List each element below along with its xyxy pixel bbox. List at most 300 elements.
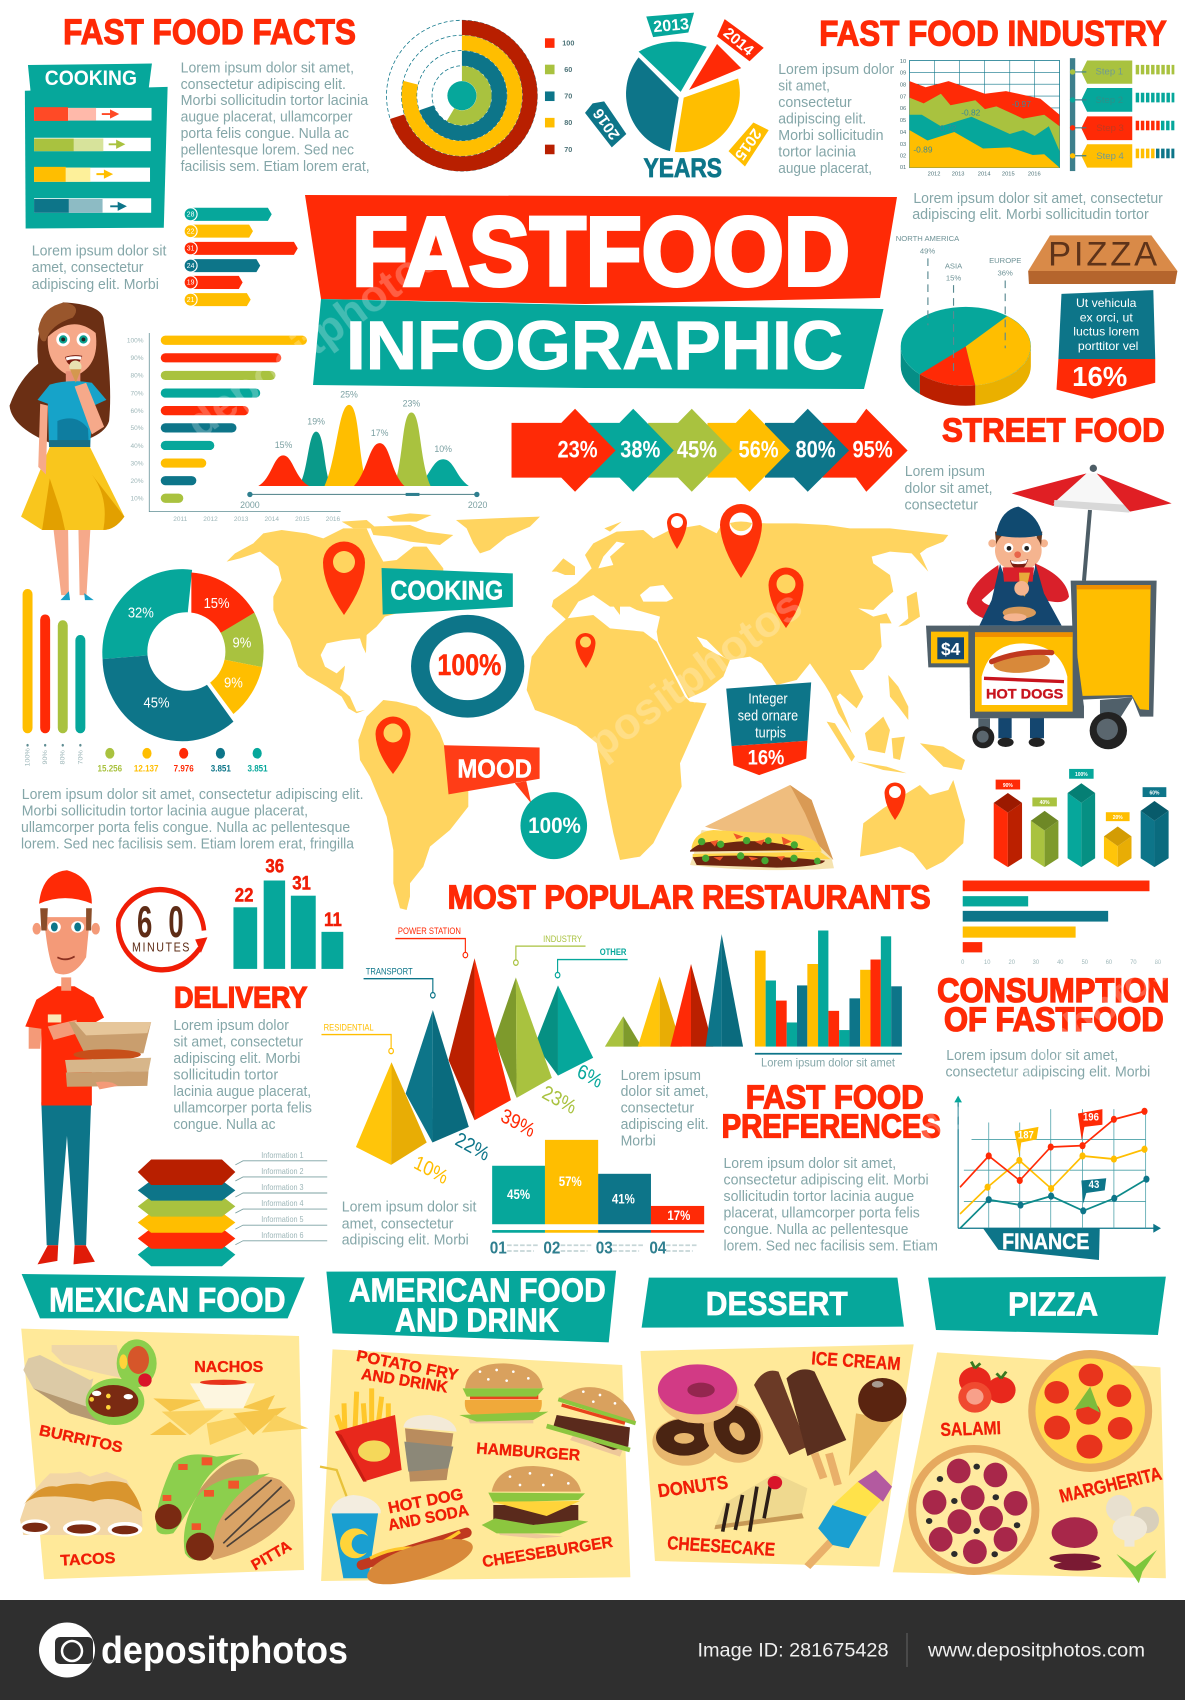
chart: stacked area: 06 [900, 106, 906, 112]
heading: consumption of fastfood: OF FASTFOOD [944, 1000, 1164, 1038]
text: facts paragraph: porta felis congue. Nulla ac [181, 125, 350, 142]
chart: horizontal bars: 40 [1057, 959, 1064, 966]
legend: donut values: 7.976 [174, 763, 194, 774]
panel: pizza: SALAMI [940, 1418, 1001, 1441]
chart: pyramids: INDUSTRY [543, 934, 582, 944]
ribbon: percentage chevrons [512, 409, 908, 492]
chart: donut: 9% [232, 634, 252, 651]
chart: delivery bars: 11 [324, 908, 342, 930]
chart: horizontal progress bars: 60% [130, 408, 144, 415]
chart: horizontal bars: 0 [961, 959, 965, 966]
chart: 3D pie by region: 36% [998, 269, 1013, 278]
text: facts paragraph: facilisis sem. Etiam lorem erat, [181, 158, 370, 175]
icon: rainbow popsicle [807, 1470, 892, 1567]
text: consumption paragraph: Lorem ipsum dolor sit amet, [946, 1046, 1118, 1063]
icon: 60 minutes clock: 6 [137, 896, 152, 947]
chart: stacked area: 09 [900, 71, 906, 77]
chart: layered hexagons: Information 5 [261, 1214, 304, 1224]
panel: mexican food [20, 1274, 308, 1579]
legend: donut values: 3.851 [248, 763, 268, 774]
panel: dessert [641, 1278, 914, 1567]
chart: pyramids: OTHER [600, 946, 626, 957]
chart: 3D bars [994, 769, 1169, 867]
heading: most popular restaurants: MOST POPULAR RESTAURANTS [448, 879, 931, 916]
upper right section [512, 13, 1177, 513]
icon: chocolate popsicles [754, 1369, 846, 1485]
chart: pyramids: 10% [411, 1152, 451, 1190]
chart: 3D pie by region: EUROPE [989, 256, 1021, 265]
chart: four columns: 01 [490, 1237, 507, 1258]
ribbon: percentage chevrons: 56% [738, 438, 779, 464]
chart: finance lines: 196 [1083, 1112, 1099, 1124]
text: facts paragraph [181, 59, 370, 175]
icon: salami, mushrooms and basil [1049, 1495, 1159, 1583]
chart: horizontal bars: 50 [1082, 959, 1088, 966]
panel: american food and drink: HAMBURGER [476, 1440, 581, 1465]
text: donut paragraph: ullamcorper porta felis congue. Nulla ac pellentesque [21, 818, 350, 835]
text: street food note: consectetur [905, 496, 978, 513]
text: donut paragraph: Morbi sollicitudin tortor lacinia augue placerat, [22, 801, 308, 819]
watermarks [177, 230, 1181, 1158]
middle right section [448, 682, 1169, 1260]
chart: horizontal progress bars: 2015 [295, 516, 310, 523]
callout: 16 percent [1056, 290, 1155, 399]
chart: stacked area: 03 [900, 142, 906, 148]
chart: 3D bars: 60% [1149, 790, 1160, 797]
chart: stacked area: 05 [900, 118, 906, 124]
text: pyramid note: amet, consectetur [342, 1214, 454, 1231]
panel: mexican food: TACOS [60, 1550, 116, 1570]
heading: delivery: DELIVERY [174, 980, 307, 1014]
map pins [323, 504, 906, 820]
chart: four columns: 03 [596, 1237, 613, 1258]
chart: pyramids: 6% [574, 1060, 605, 1093]
chart: 3D pie by region: 49% [920, 247, 935, 256]
text: street food note: Lorem ipsum [905, 463, 985, 480]
chart: vertical tube bars: 90% [42, 750, 49, 764]
ribbon: percentage chevrons: 95% [853, 438, 893, 464]
chart: layered hexagons: Information 4 [261, 1198, 304, 1208]
icon: pizza box: PIZZA [1048, 236, 1157, 274]
chart: stacked area: 2014 [978, 172, 991, 178]
panel: american food and drink: HOT DOG [387, 1486, 465, 1517]
chart: horizontal bars: 60 [1106, 959, 1113, 966]
text: industry paragraph: adipiscing elit. [778, 111, 866, 128]
chart: years pie: 2016 [590, 105, 623, 143]
text: street food note: dolor sit amet, [905, 480, 993, 497]
legend: rings: 70 [564, 145, 572, 154]
middle left section [21, 568, 704, 1266]
icon: burrito [23, 1339, 157, 1425]
text: preferences paragraph [724, 1154, 938, 1254]
chart: donut: 32% [128, 604, 154, 621]
chart: mountain peaks: 17% [371, 428, 389, 438]
world map [227, 513, 965, 910]
chart: mountain peaks: 2020 [468, 500, 487, 510]
panel: american food and drink [320, 1271, 636, 1594]
chart: mountain peaks [240, 390, 487, 510]
chart: finance lines [954, 1096, 1161, 1260]
callout: 16 percent: Ut vehicula [1076, 296, 1137, 310]
chart: arrow bars: 19 [187, 280, 195, 287]
legend: rings: 70 [564, 92, 572, 101]
chart: stacked area: -0.97 [1012, 99, 1031, 109]
chart: four columns: 41% [612, 1191, 635, 1206]
chart: stacked area: 07 [900, 94, 906, 100]
chart: layered hexagons: Information 2 [261, 1166, 304, 1176]
callout: 16 percent: luctus lorem [1073, 325, 1139, 339]
footer bar: depositphotos [101, 1630, 348, 1672]
panel: american food and drink: AND SODA [387, 1502, 471, 1535]
chart: years pie: 2013 [653, 15, 690, 36]
icon: tacos [20, 1472, 143, 1537]
chart: horizontal progress bars: 2016 [326, 516, 341, 523]
chart: finance lines: 43 [1089, 1179, 1100, 1191]
text: preferences paragraph: sollicitudin tortor lacinia augue [724, 1187, 914, 1204]
footer bar [0, 1600, 1185, 1700]
chart: layered hexagons: Information 3 [261, 1182, 304, 1192]
heading: consumption of fastfood [937, 971, 1169, 1038]
chart: 3D bars: 100% [1075, 772, 1088, 778]
icon: donuts [652, 1364, 775, 1473]
legend: rings: 100 [562, 39, 574, 48]
icon: nachos [150, 1380, 308, 1445]
panel: cooking bars [25, 64, 168, 228]
chart: horizontal progress bars: 30% [130, 460, 144, 467]
chart: finance lines: 187 [1018, 1130, 1034, 1142]
text: facts paragraph: Lorem ipsum dolor sit amet, [181, 59, 354, 76]
panel: american food and drink: CHEESEBURGER [481, 1534, 614, 1571]
chart: pyramids: TRANSPORT [366, 966, 413, 976]
chart: years pie: YEARS [644, 153, 722, 183]
panel: american food and drink: AMERICAN FOOD [349, 1271, 606, 1309]
chart: 3D bars: 20% [1113, 815, 1123, 821]
chart: donut: 45% [144, 694, 170, 711]
chart: arrow bars: 21 [187, 297, 195, 304]
chart: four columns: 02 [543, 1237, 560, 1258]
chart: delivery bars: 36 [265, 854, 284, 877]
chart: vertical tube bars: 80% [60, 750, 67, 764]
chart: arrow bars: 31 [187, 246, 195, 253]
chart: horizontal progress bars: 70% [130, 390, 144, 397]
chart: four columns: 57% [559, 1174, 582, 1189]
chart: horizontal progress bars: 80% [130, 373, 144, 380]
chart: steps [1070, 58, 1174, 171]
panel: american food and drink: AND DRINK [395, 1301, 559, 1339]
chart: horizontal bars: 30 [1033, 959, 1040, 966]
text: facts paragraph: augue placerat, ullamcorper [181, 109, 352, 126]
text: facts paragraph: consectetur adipiscing elit. [181, 76, 346, 93]
chart: horizontal progress bars: 100% [127, 338, 144, 345]
chart: 3D bars: 90% [1003, 782, 1013, 789]
legend: donut values: 15.256 [98, 763, 122, 774]
chart: horizontal progress bars: 2014 [264, 516, 279, 523]
panel: dessert: DESSERT [706, 1286, 848, 1323]
chart: steps: Step 2 [1095, 95, 1123, 106]
chart: arrow bars: 24 [187, 263, 195, 270]
footer bar: www.depositphotos.com [927, 1640, 1145, 1662]
chart: stacked area: -0.89 [913, 145, 933, 155]
chart: stacked area: 2013 [952, 172, 965, 178]
callout: 16 percent: ex orci, ut [1080, 310, 1133, 324]
panel: american food and drink: AND DRINK [360, 1366, 449, 1397]
ribbon: percentage chevrons: 38% [620, 438, 660, 464]
icon: cheeseburger [482, 1466, 588, 1538]
chart: horizontal bars [961, 881, 1162, 966]
text: triangles note: adipiscing elit. [621, 1115, 709, 1132]
chart: pyramids: 39% [498, 1105, 538, 1143]
panel: mexican food: BURRITOS [37, 1422, 124, 1457]
chart: 3D pie by region: ASIA [945, 262, 963, 271]
chart: donut: 15% [204, 594, 230, 611]
legend: rings [545, 38, 574, 154]
panel: pizza [893, 1277, 1166, 1583]
icon: 60 minutes clock: MINUTES [132, 941, 190, 955]
text: pie note: adipiscing elit. Morbi sollicitudin tortor [912, 206, 1149, 223]
chart: stacked area: 10 [900, 59, 906, 65]
chart: stacked area: 2016 [1028, 172, 1041, 178]
chart: vertical tube bars: 70% [78, 750, 84, 764]
chart: layered hexagons: Information 6 [261, 1231, 304, 1240]
upper left section [10, 13, 574, 600]
heading: consumption of fastfood: CONSUMPTION [937, 971, 1169, 1009]
chart: horizontal bars: 80 [1155, 959, 1162, 966]
chart: stacked area: 01 [900, 165, 906, 171]
chart: pyramids: 23% [539, 1082, 579, 1119]
chart: horizontal progress bars: 2013 [234, 516, 249, 523]
text: triangles note: Morbi [621, 1132, 656, 1149]
chart: horizontal progress bars [127, 333, 341, 523]
text: facts paragraph: Morbi sollicitudin tortor lacinia [181, 92, 369, 109]
chart: horizontal progress bars: 50% [130, 425, 144, 432]
chart: horizontal bars: 70 [1130, 959, 1137, 966]
icon: coffee cup [403, 1415, 457, 1482]
icon: quesadilla [690, 785, 834, 870]
text: triangles note: dolor sit amet, [621, 1082, 709, 1099]
text: donut paragraph: Lorem ipsum dolor sit amet, consectetur adipiscing elit. [22, 785, 364, 802]
chart: steps: Step 3 [1096, 123, 1124, 134]
heading: fast food facts: FAST FOOD FACTS [63, 13, 356, 52]
text: delivery paragraph: adipiscing elit. Morbi [173, 1049, 300, 1066]
text: delivery paragraph: sit amet, consectetur [173, 1033, 303, 1050]
icon: 60 minutes clock: 0 [168, 896, 184, 947]
chart: grouped bars [755, 931, 902, 1070]
chart: stacked area: 2015 [1002, 172, 1015, 178]
chart: radial rings [387, 20, 537, 171]
chart: horizontal progress bars: 40% [130, 443, 144, 450]
text: delivery paragraph: ullamcorper porta felis [173, 1099, 312, 1116]
chart: triangles [605, 934, 743, 1047]
text: industry paragraph: tortor lacinia [778, 144, 857, 161]
chart: pyramids: 22% [452, 1129, 492, 1166]
character: girl with ice cream [10, 302, 124, 600]
chart: layered hexagons [138, 1151, 327, 1266]
chart: donut: 9% [224, 674, 243, 691]
label: mood bubble: MOOD [457, 755, 532, 784]
text: delivery paragraph: congue. Nulla ac [173, 1115, 276, 1132]
label: mood bubble: 100% [528, 814, 581, 839]
footer bar: Image ID: 281675428 [698, 1640, 888, 1662]
text: triangles note: consectetur [621, 1099, 694, 1116]
chart: 3D pie by region: 15% [946, 274, 961, 283]
panel: mexican food: MEXICAN FOOD [49, 1281, 286, 1319]
icon: hamburger [459, 1363, 548, 1423]
text: delivery paragraph: sollicitudin tortor [173, 1066, 279, 1083]
chart: arrow bars: 28 [187, 212, 195, 219]
chart: vertical tube bars [23, 589, 85, 766]
chart: pyramids [321, 925, 628, 1190]
icon: second burger [547, 1387, 636, 1457]
text: pie note [912, 190, 1163, 223]
chart: mountain peaks: 10% [434, 444, 452, 454]
character: hot dog vendor and cart [926, 465, 1172, 749]
chart: steps: Step 1 [1095, 67, 1123, 78]
chart: four columns: 04 [649, 1237, 667, 1258]
text: delivery paragraph: Lorem ipsum dolor [173, 1016, 289, 1033]
chart: stacked area: 2012 [928, 172, 940, 178]
chart: mountain peaks: 23% [403, 398, 420, 408]
callout: integer 16 percent: turpis [755, 725, 786, 741]
panel: dessert: DONUTS [656, 1472, 730, 1502]
icon: hot dog [362, 1530, 477, 1594]
icon: cheesecake [714, 1473, 807, 1532]
ribbon: percentage chevrons: 23% [557, 438, 598, 464]
panel: american food and drink: POTATO FRY [355, 1348, 460, 1384]
chart: horizontal progress bars: 20% [130, 478, 144, 485]
text: industry paragraph: augue placerat, [778, 160, 872, 177]
chart: mountain peaks: 15% [275, 440, 293, 450]
label: cooking ring [382, 568, 524, 718]
text: industry paragraph: Lorem ipsum dolor [778, 61, 894, 78]
chart: mountain peaks: 2000 [240, 500, 260, 510]
chart: delivery bars [233, 854, 343, 969]
callout: integer 16 percent: 16% [748, 746, 785, 770]
text: industry paragraph: consectetur [778, 94, 852, 111]
chart: years pie [585, 13, 769, 183]
text: delivery paragraph [173, 1016, 312, 1132]
panel: dessert: ICE CREAM [811, 1348, 901, 1375]
character: hot dog vendor and cart: $4 [941, 639, 961, 659]
heading: street food: STREET FOOD [942, 411, 1165, 448]
heading: fast food preferences [722, 1079, 941, 1145]
text: donut paragraph: lorem. Sed nec facilisis sem. Etiam lorem erat, fringilla [21, 834, 354, 852]
icon: pizza box [1028, 235, 1177, 284]
icon: 60 minutes clock [118, 890, 207, 970]
icon: soda cup [320, 1467, 381, 1578]
panel: mexican food: PITTA [248, 1538, 294, 1574]
text: pie note: Lorem ipsum dolor sit amet, consectetur [913, 190, 1163, 207]
ribbon: percentage chevrons: 80% [795, 438, 836, 464]
text: cooking note: Lorem ipsum dolor sit [32, 243, 167, 260]
chart: arrow bars [184, 208, 298, 306]
character: hot dog vendor and cart: HOT DOGS [986, 686, 1063, 702]
chart: horizontal progress bars: 2011 [173, 516, 188, 523]
callout: integer 16 percent [726, 682, 811, 775]
chart: delivery bars: 31 [292, 871, 311, 894]
icon: tomatoes [958, 1362, 1016, 1413]
chart: mountain peaks: 25% [340, 390, 358, 400]
text: industry paragraph [778, 61, 894, 177]
label: cooking ring: 100% [437, 648, 501, 682]
callout: 16 percent: porttitor vel [1078, 339, 1138, 353]
heading: fast food preferences: PREFERENCES [722, 1108, 941, 1145]
text: cooking note: adipiscing elit. Morbi [32, 276, 159, 293]
chart: mountain peaks: 19% [307, 416, 325, 426]
label: mood bubble [444, 745, 587, 859]
text: cooking note: amet, consectetur [32, 259, 144, 276]
text: preferences paragraph: Lorem ipsum dolor sit amet, [724, 1154, 896, 1171]
text: street food note [905, 463, 993, 513]
text: preferences paragraph: consectetur adipiscing elit. Morbi [724, 1171, 929, 1188]
chart: stacked area: -0.72 [937, 123, 957, 133]
panel: cooking bars: COOKING [45, 66, 137, 90]
legend: donut values: 12.137 [134, 763, 159, 774]
icon: fries [335, 1388, 402, 1482]
text: cooking note [32, 243, 167, 293]
text: industry paragraph: sit amet, [778, 78, 830, 95]
chart: horizontal bars: 10 [984, 959, 991, 966]
text: consumption paragraph: consectetur adipiscing elit. Morbi [946, 1063, 1150, 1080]
text: consumption paragraph [946, 1046, 1150, 1080]
chart: years pie: 2014 [720, 25, 757, 60]
chart: pyramids: POWER STATION [398, 925, 461, 936]
text: pyramid note: Lorem ipsum dolor sit [342, 1198, 477, 1215]
icon: ice cream cone [849, 1378, 906, 1476]
hero banner: infographic: INFOGRAPHIC [346, 307, 843, 384]
text: triangles note: Lorem ipsum [621, 1066, 701, 1083]
heading: fast food preferences: FAST FOOD [746, 1079, 924, 1116]
chart: layered hexagons: Information 1 [261, 1151, 304, 1160]
callout: 16 percent: 16% [1072, 361, 1127, 392]
watermarks: depositphotos [907, 940, 1181, 1158]
text: delivery paragraph: lacinia augue placerat, [173, 1082, 311, 1099]
text: facts paragraph: pellentesque lorem. Sed nec [181, 142, 354, 159]
watermarks: depositphotos [177, 230, 451, 448]
icon: pitta [155, 1453, 295, 1561]
ribbon: percentage chevrons: 45% [677, 438, 717, 464]
text: pyramid note [342, 1198, 477, 1248]
text: preferences paragraph: congue. Nulla ac pellentesque [724, 1220, 909, 1237]
chart: grouped bars: Lorem ipsum dolor sit amet [761, 1057, 896, 1070]
chart: arrow bars: 22 [187, 228, 195, 235]
chart: four columns [490, 1140, 704, 1258]
chart: stacked area: -0.82 [961, 108, 981, 118]
label: cooking ring: COOKING [390, 576, 503, 606]
legend: rings: 60 [564, 65, 572, 74]
icon: margherita pizza [1028, 1350, 1152, 1472]
chart: finance lines: FINANCE [1002, 1229, 1090, 1254]
chart: four columns: 17% [667, 1208, 690, 1223]
text: pyramid note: adipiscing elit. Morbi [342, 1230, 469, 1248]
chart: delivery bars: 22 [235, 883, 254, 906]
chart: 3D pie by region: NORTH AMERICA [896, 234, 960, 243]
chart: horizontal progress bars: 2012 [203, 516, 218, 523]
chart: stacked area [900, 59, 1060, 178]
character: delivery man [25, 870, 151, 1264]
chart: horizontal progress bars: 90% [130, 355, 144, 362]
legend: donut values [98, 748, 268, 774]
chart: 3D bars: 40% [1040, 800, 1050, 806]
text: industry paragraph: Morbi sollicitudin [778, 127, 884, 144]
watermarks: depositphotos [537, 580, 811, 798]
panel: mexican food: NACHOS [194, 1359, 263, 1376]
text: triangles note [621, 1066, 709, 1149]
chart: 3D pie by region [896, 234, 1031, 406]
callout: integer 16 percent: Integer [748, 691, 788, 707]
chart: vertical tube bars: 100% [25, 748, 31, 766]
panel: dessert: CHEESECAKE [666, 1533, 776, 1561]
chart: years pie: 2015 [731, 125, 764, 163]
